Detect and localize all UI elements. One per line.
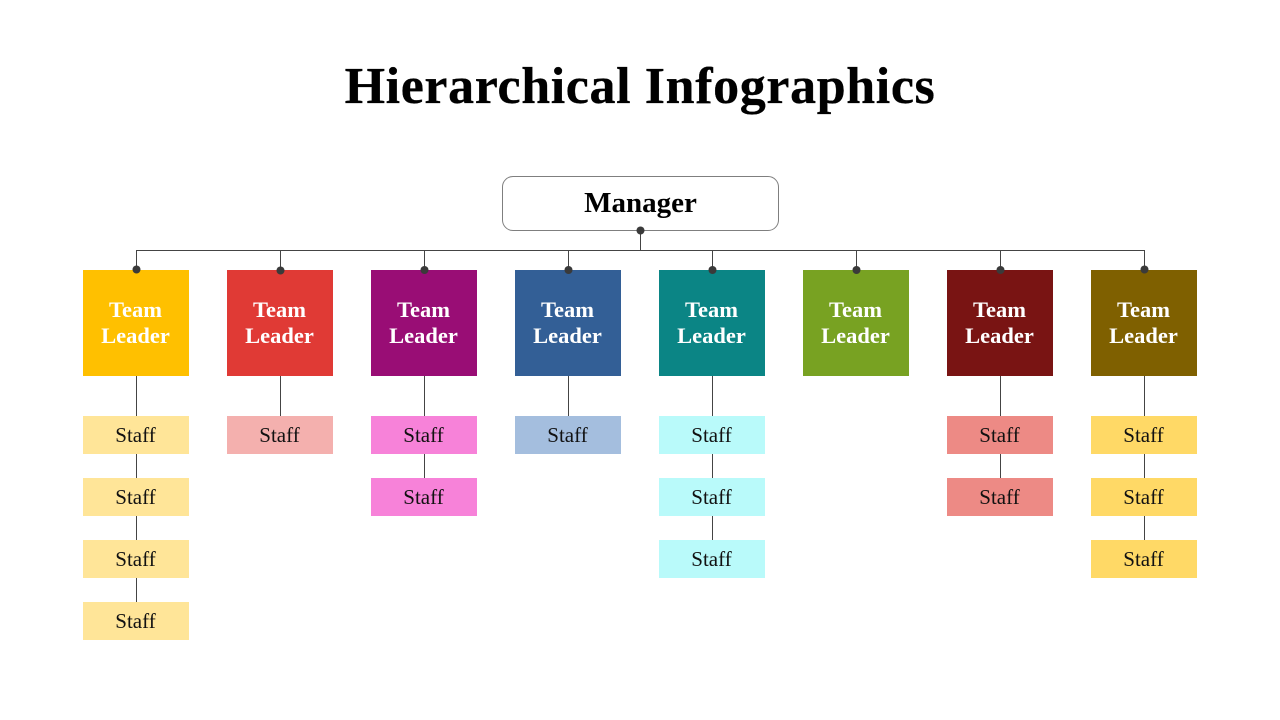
leader 4 [515, 270, 621, 376]
leader 1: Leader [101, 323, 170, 348]
leader 5: Leader [677, 323, 746, 348]
leader 7: Leader [965, 323, 1034, 348]
text: Staff [403, 485, 444, 509]
staff column 5 [659, 416, 765, 578]
text: Staff [979, 485, 1020, 509]
box: manager [502, 176, 779, 231]
staff column 8 [1091, 416, 1197, 578]
text: Staff [1123, 547, 1164, 571]
leader 5: Team [685, 297, 738, 322]
staff column 4 [515, 416, 621, 454]
text: Staff [691, 485, 732, 509]
text: Staff [115, 609, 156, 633]
leader 2: Team [253, 297, 306, 322]
staff column 1 [83, 416, 189, 640]
box: manager: Manager [584, 187, 697, 219]
staff column 4: Staff [547, 423, 588, 447]
leader 2: Leader [245, 323, 314, 348]
leader 3 [371, 270, 477, 376]
leader 3: Team [397, 297, 450, 322]
text: Staff [691, 423, 732, 447]
leader 8: Team [1117, 297, 1170, 322]
leader 5 [659, 270, 765, 376]
staff column 7 [947, 416, 1053, 516]
leader 2 [227, 270, 333, 376]
staff column 3 [371, 416, 477, 516]
leader 3: Leader [389, 323, 458, 348]
text: Staff [115, 485, 156, 509]
staff column 2: Staff [259, 423, 300, 447]
leader 4: Leader [533, 323, 602, 348]
leader 8: Leader [1109, 323, 1178, 348]
text: Staff [403, 423, 444, 447]
leader 6: Team [829, 297, 882, 322]
leader 6: Leader [821, 323, 890, 348]
text: Staff [115, 547, 156, 571]
text: Staff [1123, 485, 1164, 509]
leader 7 [947, 270, 1053, 376]
leader 7: Team [973, 297, 1026, 322]
title: Hierarchical Infographics [345, 58, 935, 115]
text: Staff [979, 423, 1020, 447]
leader 6 [803, 270, 909, 376]
leader 1 [83, 270, 189, 376]
leader 1: Team [109, 297, 162, 322]
leader 8 [1091, 270, 1197, 376]
text: Staff [115, 423, 156, 447]
text: Staff [1123, 423, 1164, 447]
text: Staff [691, 547, 732, 571]
staff column 2 [227, 416, 333, 454]
leader 4: Team [541, 297, 594, 322]
